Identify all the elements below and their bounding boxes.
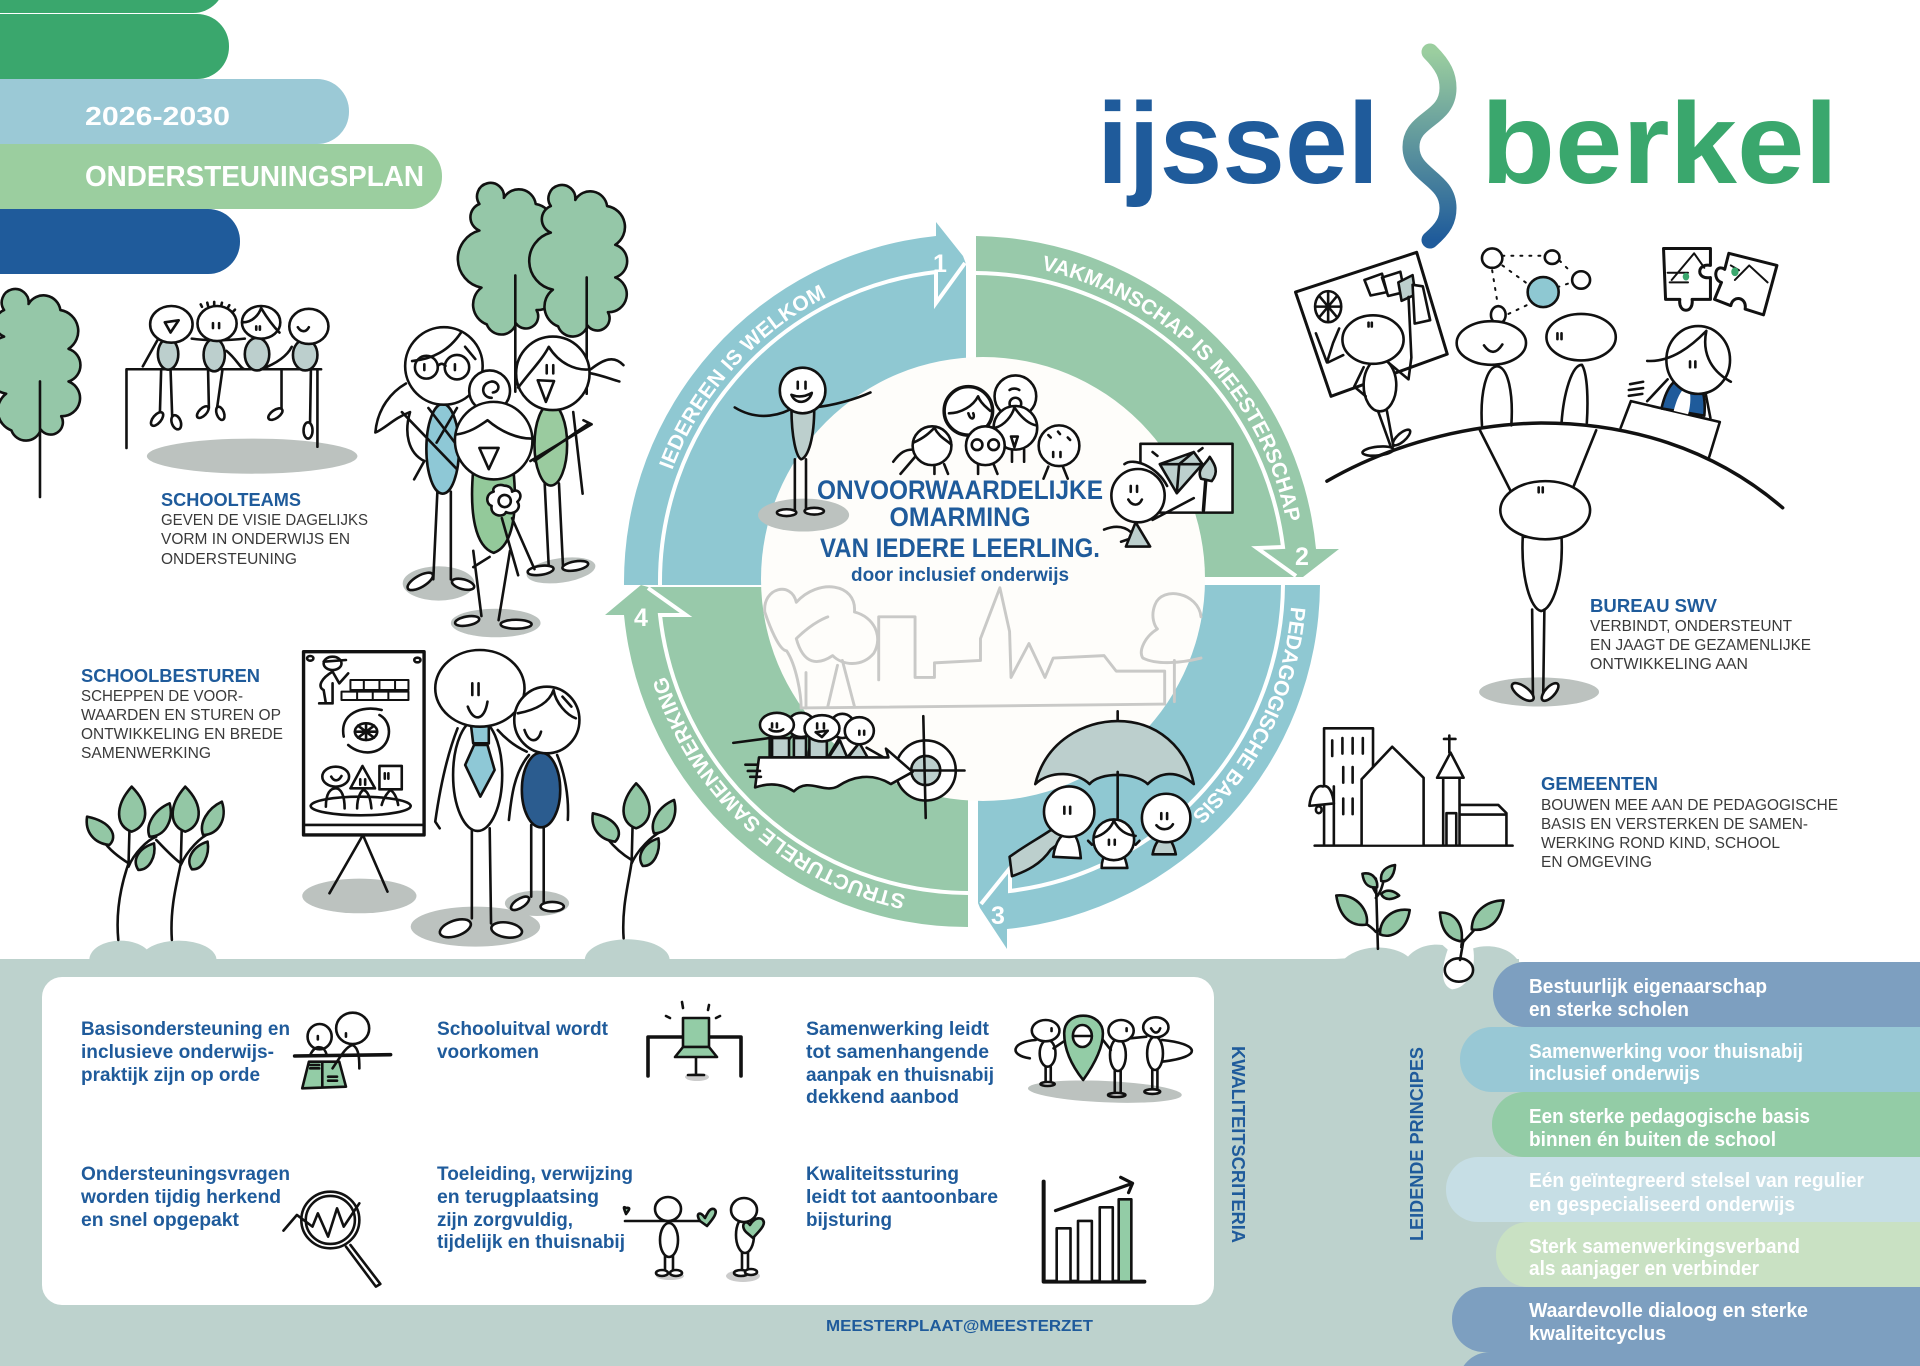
circular model with four arrows <box>605 222 1339 949</box>
label: leidende principes: LEIDENDE PRINCIPES <box>1407 1047 1427 1241</box>
seed in the ground <box>1443 940 1474 989</box>
tall man <box>435 650 527 941</box>
text: schoolbesturen: SCHEPPEN DE VOOR- <box>81 688 243 705</box>
years: 2026-2030 <box>85 101 230 131</box>
text: schoolbesturen: WAARDEN EN STUREN OP <box>81 707 281 724</box>
quadrant 2: vakmanschap is meesterschap: 2 <box>1295 543 1309 571</box>
centre statement: VAN IEDERE LEERLING. <box>820 533 1100 563</box>
woman at desk <box>1621 326 1731 457</box>
criterion 1: Basisondersteuning en <box>81 1019 290 1040</box>
woman with glasses <box>375 327 483 593</box>
quadrant 2: vakmanschap is meesterschap: VAKMANSCHAP IS MEESTERSCHAP <box>1044 256 1300 520</box>
centre statement: door inclusief onderwijs <box>851 565 1069 586</box>
text: schoolteams: SCHOOLTEAMS <box>161 489 301 510</box>
criterion 2: voorkomen <box>437 1042 539 1063</box>
centre statement <box>817 475 1103 586</box>
principle 1 <box>1493 962 1920 1027</box>
illustration: painter with diamond <box>1104 444 1233 547</box>
criterion 4: worden tijdig herkend <box>80 1187 281 1208</box>
text: bureau swv: EN JAAGT DE GEZAMENLIJKE <box>1590 637 1811 654</box>
criterion 5: tijdelijk en thuisnabij <box>437 1232 625 1253</box>
illustration: municipal buildings <box>1309 728 1513 846</box>
guiding principles stack <box>1446 962 1920 1366</box>
text: schoolbesturen: SAMENWERKING <box>81 745 211 762</box>
illustration: bureau swv figures on a curved ground <box>1296 248 1783 707</box>
label: kwaliteitscriteria: KWALITEITSCRITERIA <box>1228 1046 1248 1243</box>
quadrant 3: pedagogische basis <box>978 585 1320 949</box>
criterion 3: dekkend aanbod <box>806 1087 959 1108</box>
criterion 3: Samenwerking leidt <box>806 1019 990 1040</box>
criterion 6 <box>806 1164 998 1231</box>
illustration: sprouts left of the circle <box>87 783 675 940</box>
criterion 3: tot samenhangende <box>806 1042 989 1063</box>
curved ground <box>1327 423 1783 508</box>
principle 3 <box>1492 1092 1920 1157</box>
principle 2: Samenwerking voor thuisnabij <box>1529 1041 1803 1063</box>
logo: ijssel berkel: berkel <box>1481 80 1838 208</box>
text: schoolbesturen <box>81 665 283 762</box>
quadrant 1: iedereen is welkom: IEDEREEN IS WELKOM <box>659 284 826 469</box>
bottom band with mounds <box>0 939 1920 1366</box>
principle 6: kwaliteitcyclus <box>1529 1323 1666 1345</box>
plant c <box>592 783 675 938</box>
principle 2 <box>1460 1027 1920 1092</box>
criterion 1: inclusieve onderwijs- <box>81 1042 274 1063</box>
quality criteria panel <box>42 977 1214 1305</box>
principle 4: Eén geïntegreerd stelsel van regulier <box>1529 1170 1864 1192</box>
text: bureau swv <box>1590 595 1811 673</box>
header bars with plan title <box>0 0 442 274</box>
quadrant 3: pedagogische basis: PEDAGOGISCHE BASIS <box>1194 608 1306 823</box>
illustration: sprouts and seed right <box>1336 865 1504 966</box>
quadrant 1: iedereen is welkom: 1 <box>933 250 947 278</box>
criterion 1: praktijk zijn op orde <box>81 1065 260 1086</box>
text: gemeenten: WERKING ROND KIND, SCHOOL <box>1541 835 1780 852</box>
criterion 5: en terugplaatsing <box>437 1187 599 1208</box>
plant a <box>87 787 171 940</box>
front woman with bun <box>402 370 592 629</box>
text: schoolteams <box>161 489 368 568</box>
criterion 1 <box>81 1019 290 1086</box>
text: bureau swv: ONTWIKKELING AAN <box>1590 656 1748 673</box>
illustration: children under umbrella <box>1010 711 1194 876</box>
illustration: three school team members <box>375 327 623 637</box>
text: bureau swv: VERBINDT, ONDERSTEUNT <box>1590 618 1793 635</box>
icon: rising bar chart <box>1044 1177 1144 1282</box>
plant b <box>156 787 224 940</box>
icon: figures exchanging hearts <box>624 1197 764 1282</box>
credit line: MEESTERPLAAT@MEESTERZET <box>826 1318 1094 1335</box>
criterion 5: Toeleiding, verwijzing <box>437 1164 633 1185</box>
text: schoolbesturen: SCHOOLBESTUREN <box>81 665 260 686</box>
text: gemeenten <box>1541 773 1838 871</box>
criterion 4: Ondersteuningsvragen <box>81 1164 290 1185</box>
plan title: ONDERSTEUNINGSPLAN <box>85 161 424 193</box>
quadrant 4: structurele samenwerking <box>605 585 968 927</box>
icon: two figures with a book <box>295 1013 391 1088</box>
quadrant 3: pedagogische basis: 3 <box>991 902 1005 930</box>
illustration: person with open arms <box>735 368 870 532</box>
trees left <box>0 183 627 497</box>
principle 6: Waardevolle dialoog en sterke <box>1529 1300 1808 1322</box>
principle 2: inclusief onderwijs <box>1529 1063 1700 1085</box>
quadrant 2: vakmanschap is meesterschap <box>976 236 1339 577</box>
illustration: two board members <box>411 650 579 947</box>
principle 6 <box>1452 1287 1920 1352</box>
principle 1: Bestuurlijk eigenaarschap <box>1529 976 1767 998</box>
criterion 5: zijn zorgvuldig, <box>437 1210 573 1231</box>
illustration: flip chart <box>302 652 424 913</box>
icon: empty chair at a desk <box>648 1002 741 1081</box>
text: schoolteams: GEVEN DE VISIE DAGELIJKS <box>161 512 368 529</box>
text: bureau swv: BUREAU SWV <box>1590 595 1718 616</box>
centre disc <box>761 357 1205 801</box>
illustration: group of children <box>893 375 1079 479</box>
principle 5: Sterk samenwerkingsverband <box>1529 1236 1800 1258</box>
principle 3: Een sterke pedagogische basis <box>1529 1106 1810 1128</box>
text: gemeenten: GEMEENTEN <box>1541 773 1658 794</box>
principle 5 <box>1496 1222 1920 1287</box>
woman with ponytail <box>516 337 623 577</box>
principle 1: en sterke scholen <box>1529 999 1689 1021</box>
criterion 6: leidt tot aantoonbare <box>806 1187 998 1208</box>
centre statement: ONVOORWAARDELIJKE <box>817 475 1103 505</box>
criterion 3 <box>806 1019 994 1108</box>
quadrant 4: structurele samenwerking: 4 <box>634 604 648 632</box>
puzzle pieces <box>1664 248 1777 315</box>
text: gemeenten: BOUWEN MEE AAN DE PEDAGOGISCHE <box>1541 797 1838 814</box>
criterion 3: aanpak en thuisnabij <box>806 1065 994 1086</box>
upside-down figure <box>1480 430 1596 704</box>
illustration: four children on a bench <box>126 302 357 474</box>
principle 3: binnen én buiten de school <box>1529 1129 1776 1151</box>
criterion 5 <box>437 1164 633 1253</box>
principle 4 <box>1446 1157 1920 1222</box>
text: gemeenten: BASIS EN VERSTERKEN DE SAMEN- <box>1541 816 1808 833</box>
grey village skyline in the disc <box>765 587 1201 708</box>
quadrant 1: iedereen is welkom <box>624 222 966 585</box>
two figures standing on the arc <box>1457 306 1616 425</box>
logo: ijssel berkel: ijssel <box>1097 80 1379 208</box>
criterion 6: bijsturing <box>806 1210 892 1231</box>
criterion 2: Schooluitval wordt <box>437 1019 609 1040</box>
principle 4: en gespecialiseerd onderwijs <box>1529 1194 1795 1216</box>
text: schoolteams: ONDERSTEUNING <box>161 551 297 568</box>
icon: magnifying glass <box>283 1192 380 1287</box>
criterion 6: Kwaliteitssturing <box>806 1164 959 1185</box>
illustration: team in a boat aiming at target <box>733 713 964 818</box>
centre statement: OMARMING <box>890 502 1030 532</box>
principle 7 <box>1458 1352 1920 1366</box>
icon: figures around a location pin <box>1016 1016 1192 1106</box>
text: gemeenten: EN OMGEVING <box>1541 854 1652 871</box>
text: schoolteams: VORM IN ONDERWIJS EN <box>161 531 350 548</box>
short man <box>508 687 579 912</box>
principle 5: als aanjager en verbinder <box>1529 1258 1759 1280</box>
criterion 2 <box>437 1019 609 1063</box>
network of connected circles <box>1482 248 1590 314</box>
text: schoolbesturen: ONTWIKKELING EN BREDE <box>81 726 283 743</box>
logo: ijssel berkel <box>1097 52 1838 240</box>
quadrant 4: structurele samenwerking: STRUCTURELE SAMENWERKING <box>654 678 904 908</box>
presenter with board <box>1296 252 1447 457</box>
criterion 4: en snel opgepakt <box>81 1210 240 1231</box>
criterion 4 <box>80 1164 290 1231</box>
